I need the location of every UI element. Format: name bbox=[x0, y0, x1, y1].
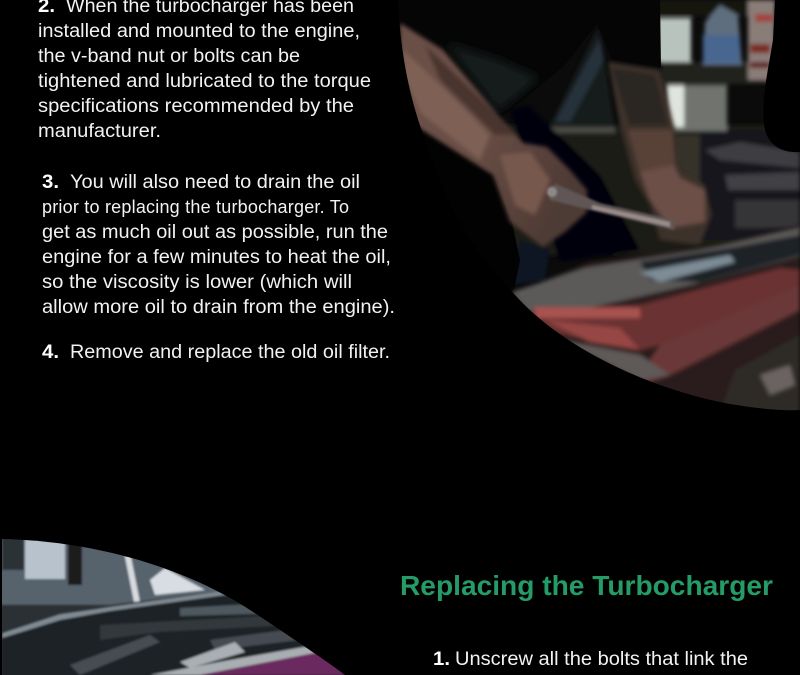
step 2 text block bbox=[38, 0, 371, 142]
right arm and hand bbox=[608, 62, 712, 245]
step 4 text block: Remove and replace the old oil filter. bbox=[70, 342, 390, 363]
garage background bbox=[500, 0, 800, 285]
step 2 text block: manufacturer. bbox=[38, 121, 161, 142]
step 1 text block: Unscrew all the bolts that link the bbox=[455, 649, 748, 670]
heading: Replacing the Turbocharger: Replacing the Turbocharger bbox=[400, 570, 773, 601]
step 3 text block: so the viscosity is lower (which will bbox=[42, 272, 352, 293]
step 3 text block bbox=[42, 172, 395, 318]
engine bay bbox=[510, 225, 800, 420]
step 3 text block: engine for a few minutes to heat the oil, bbox=[42, 247, 391, 268]
left arm and hand bbox=[400, 23, 587, 247]
step 3 text block: prior to replacing the turbocharger. To bbox=[42, 197, 349, 217]
black t-shirt bbox=[600, 0, 661, 68]
step 3 text block: 3. bbox=[42, 172, 59, 193]
step 2 text block: tightened and lubricated to the torque bbox=[38, 71, 371, 92]
step 1 text block: 1. bbox=[433, 649, 450, 670]
step 2 text block: installed and mounted to the engine, bbox=[38, 21, 360, 42]
step 3 text block: get as much oil out as possible, run the bbox=[42, 222, 388, 243]
step 2 text block: specifications recommended by the bbox=[38, 96, 354, 117]
wrench bbox=[547, 184, 675, 230]
step 4 text block: 4. bbox=[42, 342, 59, 363]
photo: car engine bay with purple cover bbox=[2, 539, 345, 675]
photo: mechanic tightening engine with wrench bbox=[390, 0, 800, 420]
dark body below arm bbox=[423, 134, 520, 290]
step 2 text block: the v-band nut or bolts can be bbox=[38, 46, 300, 67]
step 3 text block: allow more oil to drain from the engine). bbox=[42, 297, 395, 318]
step 3 text block: You will also need to drain the oil bbox=[70, 172, 360, 193]
